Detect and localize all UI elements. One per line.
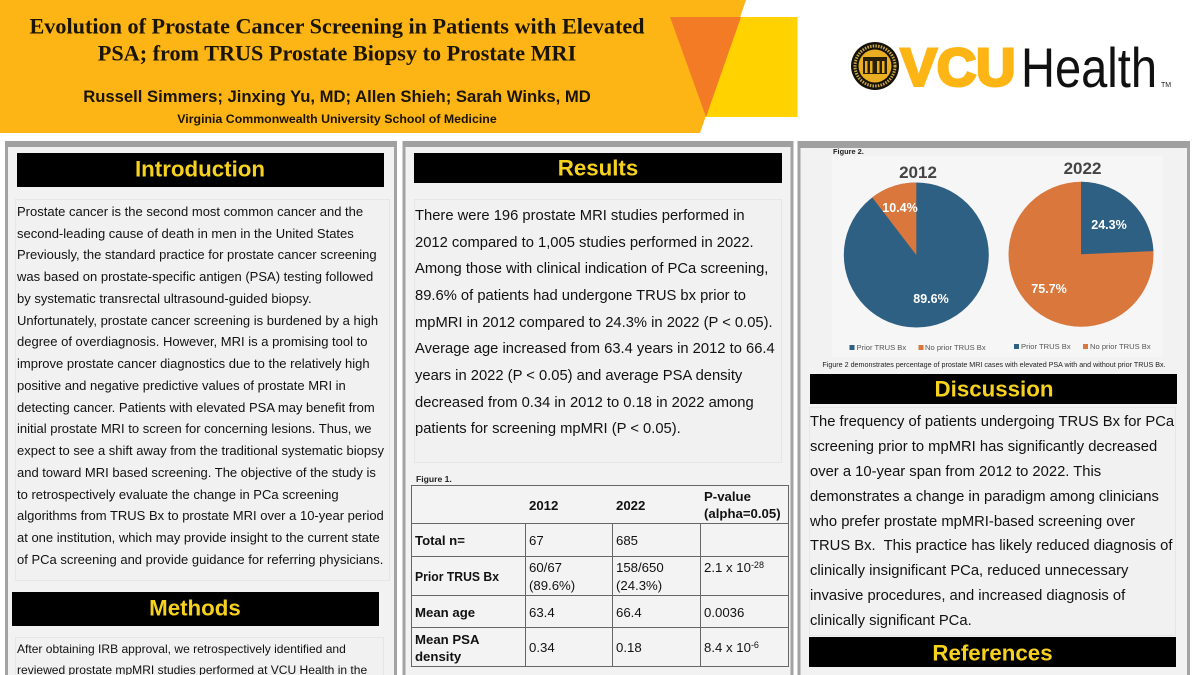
legend: 2022 — [1014, 342, 1151, 351]
text block: results: decreased from 0.34 in 2012 to 0.18 in 2022 among — [415, 395, 754, 411]
heading: Introduction: Introduction — [135, 156, 265, 182]
heading: Results: Results — [558, 156, 638, 180]
text block: discussion — [809, 408, 1176, 636]
panel: left column — [5, 141, 397, 675]
legend: 2012: Prior TRUS Bx — [856, 343, 906, 352]
text block: introduction: and toward MRI based screening. The objective of the study is — [17, 465, 376, 480]
logo wordmark: TM — [1161, 82, 1171, 89]
text block: discussion: demonstrates a change in paradigm among clinicians — [810, 489, 1159, 505]
text block: methods — [16, 638, 384, 675]
text block: results: Among those with clinical indication of PCa screening, — [415, 261, 768, 277]
table: figure 1: 63.4 — [529, 605, 555, 620]
text block: results: 2012 compared to 1,005 studies performed in 2022. — [415, 235, 754, 251]
title: PSA; from TRUS Prostate Biopsy to Prostate MRI — [98, 40, 576, 66]
table: figure 1: 0.34 — [529, 640, 555, 655]
text block: discussion: The frequency of patients undergoing TRUS Bx for PCa — [810, 414, 1175, 430]
text block: introduction: algorithms from TRUS Bx to prostate MRI over a 10-year period — [17, 508, 384, 523]
table: figure 1: 2.1 x 10 — [704, 560, 751, 575]
text block: introduction: by systematic transrectal ultrasound-guided biopsy. — [17, 291, 312, 306]
table: figure 1: Mean PSA — [415, 632, 480, 647]
figure 1 label: Figure 1. — [416, 474, 452, 484]
text block: introduction: detecting cancer. Patients with elevated PSA may benefit from — [17, 400, 375, 415]
text block: methods: After obtaining IRB approval, we retrospectively identified and — [17, 642, 346, 656]
table: figure 1: (89.6%) — [529, 578, 575, 593]
institution: Virginia Commonwealth University School of Medicine — [177, 112, 497, 126]
panel: middle column — [402, 141, 794, 675]
table: figure 1: 2022 — [616, 498, 645, 513]
text block: discussion: who prefer prostate mpMRI-based screening over — [809, 514, 1135, 530]
table: figure 1: (24.3%) — [616, 578, 662, 593]
text block: introduction: to retrospectively evaluate the change in PCa screening — [17, 487, 339, 502]
text block: discussion: over a 10-year span from 2012 to 2022. This — [810, 464, 1101, 480]
heading: Discussion — [810, 374, 1177, 404]
authors: Russell Simmers; Jinxing Yu, MD; Allen Shieh; Sarah Winks, MD — [83, 87, 591, 106]
table: figure 1: 66.4 — [616, 605, 642, 620]
table: figure 1: 0.0036 — [704, 605, 744, 620]
text block: discussion: clinically significant PCa. — [810, 613, 972, 629]
text block: results: There were 196 prostate MRI studies performed in — [415, 208, 745, 224]
pie chart: 2022 — [1008, 159, 1154, 327]
text block: introduction — [16, 200, 390, 580]
title: Evolution of Prostate Cancer Screening in Patients with Elevated — [29, 14, 645, 38]
figure 2 caption: Figure 2 demonstrates percentage of prostate MRI cases with elevated PSA with and without prior TRUS Bx. — [822, 361, 1166, 369]
heading: Methods: Methods — [149, 596, 241, 620]
table: figure 1: 8.4 x 10 — [704, 640, 751, 655]
text block: results — [414, 200, 782, 462]
figure 2 label: Figure 2. — [833, 147, 864, 156]
logo wordmark: VCU — [900, 38, 1016, 98]
pie chart: 2022: 24.3% — [1091, 218, 1127, 232]
icon: university seal — [851, 42, 899, 90]
text block: introduction: was based on prostate-specific antigen (PSA) testing followed — [16, 269, 373, 284]
heading: Methods — [12, 592, 379, 626]
table: figure 1: 2012 — [529, 498, 558, 513]
table: figure 1: (alpha=0.05) — [704, 506, 781, 521]
text block: introduction: degree of overdiagnosis. However, MRI is a promising tool to — [17, 334, 367, 349]
pie chart: 2012: 10.4% — [882, 201, 918, 215]
table: figure 1: P-value — [704, 489, 751, 504]
table: figure 1: 0.18 — [616, 640, 642, 655]
pie chart: 2022: 75.7% — [1031, 282, 1067, 296]
logo: VCU Health — [851, 36, 1171, 99]
text block: introduction: expect to see a shift away from the traditional systematic biopsy — [17, 443, 385, 458]
text block: results: mpMRI in 2012 compared to 24.3% in 2022 (P < 0.05). — [415, 315, 773, 331]
table: figure 1: -28 — [751, 560, 764, 570]
text block: results: patients for screening mpMRI (P < 0.05). — [415, 421, 681, 437]
text block: introduction: Prostate cancer is the second most common cancer and the — [17, 204, 363, 219]
table: figure 1: 60/67 — [529, 560, 562, 575]
pie chart: 2012: 89.6% — [913, 292, 949, 306]
text block: introduction: Unfortunately, prostate cancer screening is burdened by a high — [17, 313, 378, 328]
table: figure 1: density — [415, 649, 462, 664]
text block: discussion: TRUS Bx. This practice has likely reduced diagnosis of — [810, 538, 1173, 554]
table: figure 1: 158/650 — [616, 560, 664, 575]
pie chart: 2012: 2012 — [899, 163, 937, 182]
text block: introduction: improve prostate cancer diagnostics due to the relatively high — [17, 356, 370, 371]
text block: introduction: at one institution, which may provide insight to the current state — [17, 530, 380, 545]
table: figure 1: Prior TRUS Bx — [415, 569, 500, 584]
heading: Discussion: Discussion — [935, 376, 1053, 402]
panel: right column — [798, 141, 1190, 675]
pie chart: 2012 — [844, 163, 989, 328]
title — [29, 14, 645, 66]
text block: discussion: clinically insignificant PCa, reduced unnecessary — [810, 563, 1129, 579]
table: figure 1 — [412, 486, 788, 666]
text block: results: Average age increased from 63.4 years in 2012 to 66.4 — [415, 341, 775, 357]
text block: discussion: screening prior to mpMRI has significantly decreased — [810, 439, 1157, 455]
legend: 2022: No prior TRUS Bx — [1090, 342, 1151, 351]
text block: introduction: Previously, the standard practice for prostate cancer screening — [17, 247, 377, 262]
table: figure 1: Total n= — [415, 533, 465, 548]
legend: 2012 — [850, 343, 986, 352]
legend: 2022: Prior TRUS Bx — [1021, 342, 1071, 351]
legend: 2012: No prior TRUS Bx — [925, 343, 986, 352]
pie chart: 2022: 2022 — [1064, 159, 1101, 178]
text block: introduction: positive and negative predictive values of prostate MRI in — [17, 378, 346, 393]
heading: References — [809, 637, 1176, 667]
text block: results: 89.6% of patients had undergone TRUS bx prior to — [415, 288, 746, 304]
heading: Introduction — [17, 153, 384, 187]
table: figure 1: 685 — [616, 533, 638, 548]
chart: pie charts — [832, 156, 1163, 357]
text block: introduction: of PCa screening and provide guidance for referring physicians. — [17, 552, 383, 567]
text block: introduction: second-leading cause of death in men in the United States — [17, 226, 354, 241]
heading: Results — [414, 153, 782, 183]
text block: introduction: initial prostate MRI to screen for concerning lesions. Thus, we — [17, 421, 372, 436]
table: figure 1: -6 — [751, 640, 759, 650]
logo wordmark — [900, 36, 1171, 99]
text block: results: years in 2022 (P < 0.05) and average PSA density — [415, 368, 743, 384]
table: figure 1: 67 — [529, 533, 544, 548]
heading: References: References — [932, 640, 1053, 666]
table: figure 1: Mean age — [415, 605, 475, 620]
header banner — [0, 0, 798, 133]
text block: discussion: invasive procedures, and increased diagnosis of — [810, 588, 1126, 604]
logo wordmark: Health — [1021, 36, 1157, 99]
